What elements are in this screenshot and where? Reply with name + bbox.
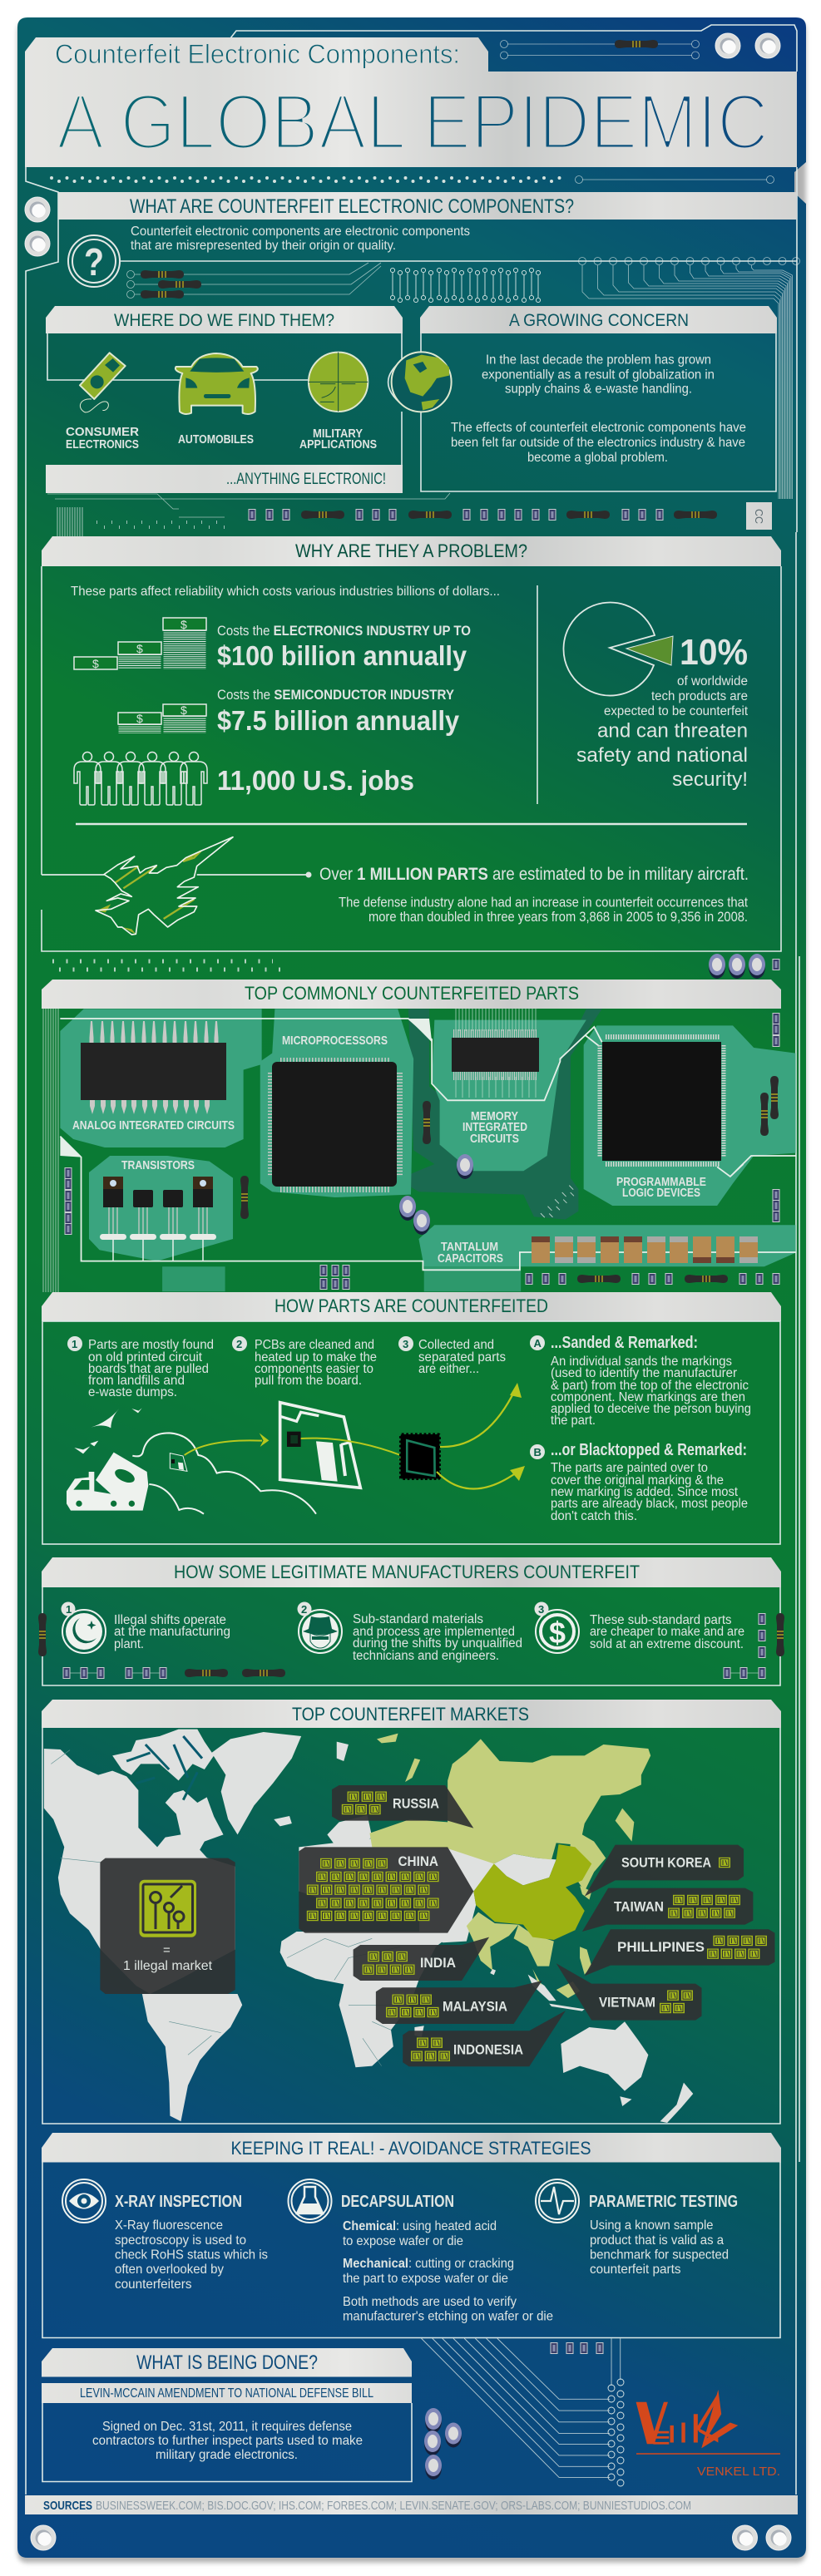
decorative traces under definition — [126, 258, 800, 499]
heading plate: KEEPING IT REAL! - AVOIDANCE STRATEGIES — [231, 2138, 591, 2159]
icon: people — [74, 752, 207, 805]
labels: where found: MILITARY — [313, 427, 363, 441]
analog chip — [81, 1021, 226, 1114]
step 1: from landfills and — [88, 1374, 185, 1388]
text: illegal shifts — [114, 1613, 230, 1651]
step 1 — [67, 1336, 214, 1399]
icon: spy: 2 — [301, 1603, 307, 1616]
million parts text — [306, 865, 749, 925]
icon: spy — [298, 1601, 342, 1653]
solder pads and capacitors row — [52, 954, 779, 979]
step 3: separated parts — [418, 1350, 506, 1364]
heading plate: A GROWING CONCERN — [509, 310, 689, 330]
strategy: decapsulation: to expose wafer or die — [343, 2234, 463, 2248]
label: microprocessors: MICROPROCESSORS — [282, 1034, 388, 1048]
text: illegal shifts: Illegal shifts operate — [114, 1613, 226, 1627]
amendment plate: LEVIN-MCCAIN AMENDMENT TO NATIONAL DEFENSE BILL — [80, 2386, 373, 2401]
step 2 — [232, 1336, 377, 1388]
icon: dollar: 3 — [538, 1603, 544, 1616]
labels: where found: CONSUMER — [66, 426, 140, 439]
transistors — [100, 1177, 216, 1261]
label: tantalum capacitors — [438, 1241, 503, 1266]
icon: military scope — [309, 353, 368, 412]
million parts text: Over 1 MILLION PARTS are estimated to be in military aircraft. — [319, 865, 749, 884]
heading plate: WHAT IS BEING DONE? — [136, 2351, 318, 2374]
amendment plate — [42, 2383, 412, 2403]
labels: where found: ELECTRONICS — [66, 438, 139, 452]
step 1: Parts are mostly found — [88, 1338, 214, 1352]
amendment text: Signed on Dec. 31st, 2011, it requires defense — [102, 2420, 352, 2434]
strategy: decapsulation — [341, 2193, 553, 2324]
concern text: supply chains & e-waste handling. — [505, 382, 692, 397]
strategy: x-ray inspection: X-RAY INSPECTION — [115, 2193, 242, 2211]
market: Taiwan — [614, 1895, 740, 1918]
arrows: sanded and blacktopped — [437, 1383, 525, 1489]
heading plate: TOP COUNTERFEIT MARKETS — [292, 1704, 529, 1725]
heading plate: WHAT ARE COUNTERFEIT ELECTRONIC COMPONENTS? — [130, 195, 574, 218]
text: illegal shifts: plant. — [114, 1637, 144, 1651]
icon: question mark — [68, 235, 120, 287]
panel: what are counterfeit components — [25, 192, 797, 287]
panel: what is being done — [42, 2348, 412, 2481]
step 1: on old printed circuit — [88, 1350, 203, 1364]
icon: money stacks 100 billion: $ — [181, 618, 187, 631]
stat: semiconductor industry — [217, 687, 460, 736]
anything electronic plate — [46, 465, 403, 493]
icon: dollar — [534, 1601, 579, 1653]
method B: cover the original marking & the — [551, 1473, 724, 1488]
main title: A GLOBAL EPIDEMIC — [57, 78, 769, 166]
amendment text: contractors to further inspect parts used to make — [92, 2434, 363, 2448]
stat: ten percent — [576, 632, 749, 791]
circuit board regions — [60, 1009, 796, 1291]
panel: a growing concern — [420, 306, 777, 491]
heading plate: WHY ARE THEY A PROBLEM? — [295, 540, 527, 561]
step 2: 2 — [236, 1338, 242, 1350]
icon: media player — [80, 353, 126, 412]
step 1: boards that are pulled — [88, 1362, 209, 1376]
sources bar — [25, 2495, 798, 2514]
icon: money stacks 7.5 billion — [118, 703, 206, 733]
stat: ten percent: 10% — [680, 632, 748, 673]
stat: electronics industry: Costs the ELECTRONICS INDUSTRY UP TO — [217, 623, 471, 639]
step 2: pull from the board. — [255, 1374, 362, 1388]
world map — [44, 1730, 774, 2123]
stat: jobs: 11,000 U.S. jobs — [217, 765, 414, 796]
market: Vietnam — [599, 1991, 693, 2013]
market: China: CHINA — [398, 1854, 438, 1869]
text: sub-standard materials: during the shifts by unqualified — [353, 1636, 522, 1651]
heading plate — [420, 306, 777, 333]
label: transistors: TRANSISTORS — [121, 1159, 195, 1172]
label: analog integrated circuits: ANALOG INTEGRATED CIRCUITS — [72, 1118, 235, 1133]
microprocessor chip — [271, 1061, 399, 1189]
logo: Venkel: VENKEL LTD. — [697, 2465, 780, 2479]
title plate — [25, 37, 797, 167]
legend: one illegal market: = — [163, 1943, 171, 1957]
strategy: parametric testing: benchmark for suspected — [590, 2248, 729, 2262]
step 1: 1 — [72, 1338, 77, 1350]
concern text: The effects of counterfeit electronic components have — [451, 421, 746, 435]
heading plate — [42, 1700, 781, 1728]
market: Indonesia — [411, 2037, 523, 2061]
market: India — [363, 1952, 456, 1975]
icon: flask — [288, 2179, 331, 2223]
heading plate — [42, 980, 781, 1009]
step 2: PCBs are cleaned and — [255, 1338, 374, 1352]
icon: money stacks 7.5 billion: $ — [181, 703, 187, 717]
heading plate — [42, 2348, 412, 2376]
stat: ten percent: security! — [672, 768, 748, 791]
method B — [530, 1441, 748, 1523]
strategy: x-ray inspection — [115, 2193, 268, 2292]
method B: don't catch this. — [551, 1509, 637, 1523]
heading plate — [42, 2133, 781, 2162]
concern text: In the last decade the problem has grown — [486, 353, 711, 368]
icon: money stacks 100 billion — [74, 618, 206, 670]
method B: B — [534, 1446, 542, 1458]
text: cheaper parts — [590, 1613, 744, 1651]
text: cheaper parts: sold at an extreme discount. — [590, 1637, 744, 1651]
subtitle: Counterfeit Electronic Components: — [55, 39, 460, 69]
method A: An individual sands the markings — [551, 1355, 732, 1369]
market: Phillipines: PHILLIPINES — [617, 1940, 705, 1955]
step 2: components easier to — [255, 1362, 373, 1376]
stat: ten percent: of worldwide — [677, 674, 748, 688]
memory chip — [452, 1009, 539, 1098]
step 1: e-waste dumps. — [88, 1385, 177, 1399]
heading plate — [42, 1292, 781, 1321]
strategy: parametric testing: counterfeit parts — [590, 2263, 680, 2277]
text: cheaper parts: are cheaper to make and are — [590, 1625, 744, 1639]
icon: globe — [388, 352, 452, 412]
market: Phillipines — [617, 1936, 767, 1959]
market: China — [307, 1854, 439, 1921]
market: Malaysia: MALAYSIA — [443, 2000, 507, 2015]
text: illegal shifts: at the manufacturing — [114, 1625, 230, 1639]
icon: car — [176, 353, 258, 414]
icon: eye — [62, 2179, 106, 2223]
strategy: decapsulation: DECAPSULATION — [341, 2193, 454, 2211]
market: Malaysia — [386, 1994, 507, 2017]
million parts text: The defense industry alone had an increase in counterfeit occurrences that — [339, 895, 748, 910]
text: sub-standard materials — [353, 1612, 522, 1663]
strategy: decapsulation: manufacturer's etching on wafer or die — [343, 2310, 553, 2324]
method A: applied to deceive the person buying — [551, 1402, 751, 1416]
label: memory integrated circuits: CIRCUITS — [470, 1133, 519, 1146]
label: tantalum capacitors: CAPACITORS — [438, 1252, 503, 1266]
panel: avoidance strategies — [42, 2133, 781, 2338]
icon: money stacks 100 billion: $ — [136, 642, 143, 655]
strategy: decapsulation: Both methods are used to verify — [343, 2295, 517, 2309]
concern text: exponentially as a result of globalization in — [482, 368, 715, 382]
label: programmable logic devices: PROGRAMMABLE — [616, 1176, 706, 1189]
strategy: x-ray inspection: often overlooked by — [115, 2263, 224, 2277]
tantalum capacitors — [532, 1236, 758, 1263]
pie chart: 10 percent — [563, 603, 673, 696]
definition text — [131, 225, 470, 253]
concern text — [451, 353, 746, 465]
panel: how parts are counterfeited — [42, 1292, 781, 1544]
labels: where found: AUTOMOBILES — [178, 433, 254, 447]
label: memory integrated circuits — [462, 1110, 527, 1146]
heading plate: WHERE DO WE FIND THEM? — [114, 310, 334, 330]
definition text: Counterfeit electronic components are electronic components — [131, 225, 470, 239]
strategy: x-ray inspection: check RoHS status which is — [115, 2248, 268, 2262]
step 3: Collected and — [418, 1338, 494, 1352]
strategy: parametric testing: product that is valid as a — [590, 2233, 724, 2248]
strategy: parametric testing: PARAMETRIC TESTING — [589, 2193, 738, 2211]
stat: semiconductor industry: Costs the SEMICONDUCTOR INDUSTRY — [217, 687, 455, 703]
method A: ...Sanded & Remarked: — [551, 1334, 698, 1352]
amendment text — [92, 2420, 363, 2462]
legend: one illegal market — [123, 1880, 213, 1973]
icon: moon: 1 — [66, 1603, 72, 1616]
bottom component strip — [47, 493, 772, 536]
bottom component strip: CC — [753, 509, 765, 524]
icon: pulse — [536, 2179, 579, 2223]
panel: top counterfeit markets — [42, 1700, 781, 2124]
step 3: are either... — [418, 1362, 479, 1376]
method A — [530, 1334, 751, 1428]
method A: component. New markings are then — [551, 1390, 745, 1404]
market: South Korea: SOUTH KOREA — [621, 1856, 711, 1871]
icon: dollar: $ — [549, 1616, 566, 1650]
strategy: decapsulation: Chemical: using heated acid — [343, 2219, 497, 2233]
logo: Venkel — [636, 2390, 780, 2479]
capacitors and resistors on board — [65, 1013, 779, 1289]
stat: ten percent: safety and national — [576, 744, 748, 767]
stat: electronics industry — [217, 623, 471, 671]
heading plate — [58, 192, 797, 220]
strategy: parametric testing: Using a known sample — [590, 2218, 714, 2233]
strategy: parametric testing — [589, 2193, 738, 2277]
panel: why are they a problem — [42, 536, 781, 951]
heading plate: TOP COMMONLY COUNTERFEITED PARTS — [245, 983, 579, 1004]
text: cheaper parts: These sub-standard parts — [590, 1613, 732, 1627]
concern text: become a global problem. — [527, 451, 668, 465]
callouts — [100, 1785, 774, 2066]
amendment text: military grade electronics. — [156, 2448, 298, 2462]
text: sub-standard materials: technicians and engineers. — [353, 1649, 499, 1663]
panel: top commonly counterfeited parts — [42, 980, 796, 1292]
stat: ten percent: tech products are — [651, 689, 748, 703]
market: Russia: RUSSIA — [393, 1797, 439, 1812]
method A: (used to identify the manufacturer — [551, 1366, 737, 1380]
method B: The parts are painted over to — [551, 1461, 708, 1475]
definition text: that are misrepresented by their origin or quality. — [131, 239, 396, 253]
sources bar: SOURCES — [43, 2499, 92, 2513]
concern text: been felt far outside of the electronics industry & have — [451, 436, 745, 450]
label: tantalum capacitors: TANTALUM — [441, 1241, 498, 1254]
strategy: x-ray inspection: spectroscopy is used to — [115, 2233, 246, 2248]
step 2: heated up to make the — [255, 1350, 377, 1364]
mounting holes bottom — [31, 2525, 791, 2550]
icon: question mark: ? — [84, 240, 104, 284]
icon: money stacks 100 billion: $ — [92, 657, 99, 670]
stat: ten percent: and can threaten — [597, 720, 748, 742]
method B: parts are already black, most people — [551, 1497, 748, 1511]
panel: how legitimate manufacturers counterfeit — [38, 1557, 784, 1685]
heading plate — [46, 306, 403, 333]
strategy: decapsulation: Mechanical: cutting or cracking — [343, 2257, 514, 2271]
strategy: x-ray inspection: X-Ray fluorescence — [115, 2218, 223, 2233]
illustration: landfill to chip — [67, 1403, 439, 1514]
method A: & part) from the top of the electronic — [551, 1379, 749, 1393]
panel: where do we find them — [46, 306, 403, 493]
anything electronic plate: ...ANYTHING ELECTRONIC! — [226, 471, 386, 488]
market: Indonesia: INDONESIA — [453, 2043, 523, 2058]
sources bar: BUSINESSWEEK.COM; BIS.DOC.GOV; IHS.COM; FORBES.COM; LEVIN.SENATE.GOV; ORS-LABS.COM; BUNNIESTUDIOS.COM — [96, 2499, 691, 2513]
stat: ten percent: expected to be counterfeit — [604, 704, 749, 718]
strategy: decapsulation: the part to expose wafer or die — [343, 2272, 508, 2286]
icon: money stacks 7.5 billion: $ — [136, 712, 143, 725]
step 3: 3 — [403, 1338, 408, 1350]
stat: electronics industry: $100 billion annually — [217, 640, 467, 671]
text: sub-standard materials: and process are implemented — [353, 1625, 515, 1639]
method A: A — [534, 1337, 542, 1350]
capacitors and traces near logo — [422, 2338, 624, 2486]
method B: new marking is added. Since most — [551, 1485, 739, 1499]
heading plate: HOW SOME LEGITIMATE MANUFACTURERS COUNTERFEIT — [174, 1562, 640, 1582]
labels: where found — [66, 426, 377, 452]
legend: one illegal market: 1 illegal market — [123, 1959, 213, 1973]
million parts text: more than doubled in three years from 3,868 in 2005 to 9,356 in 2008. — [368, 909, 748, 925]
label: memory integrated circuits: MEMORY — [471, 1110, 518, 1123]
intro text: These parts affect reliability which costs various industries billions of dollars... — [71, 585, 500, 599]
heading plate — [42, 1557, 781, 1587]
label: programmable logic devices: LOGIC DEVICES — [622, 1187, 700, 1200]
icon: moon — [62, 1601, 106, 1653]
market: Taiwan: TAIWAN — [614, 1900, 664, 1915]
market: Russia — [342, 1791, 439, 1814]
method A: the part. — [551, 1414, 596, 1428]
step 3 — [398, 1336, 506, 1376]
strategy: x-ray inspection: counterfeiters — [115, 2277, 191, 2292]
icon: fighter jet — [42, 837, 309, 935]
label: programmable logic devices — [616, 1176, 706, 1200]
labels: where found: APPLICATIONS — [299, 438, 377, 452]
text: sub-standard materials: Sub-standard materials — [353, 1612, 483, 1626]
method B: ...or Blacktopped & Remarked: — [551, 1441, 747, 1459]
stat: semiconductor industry: $7.5 billion annually — [217, 705, 460, 736]
label: memory integrated circuits: INTEGRATED — [462, 1121, 527, 1134]
market: India: INDIA — [420, 1956, 456, 1971]
heading plate — [42, 536, 781, 566]
programmable logic chip — [600, 1037, 724, 1164]
heading plate: HOW PARTS ARE COUNTERFEITED — [274, 1295, 548, 1316]
market: Vietnam: VIETNAM — [599, 1996, 655, 2011]
